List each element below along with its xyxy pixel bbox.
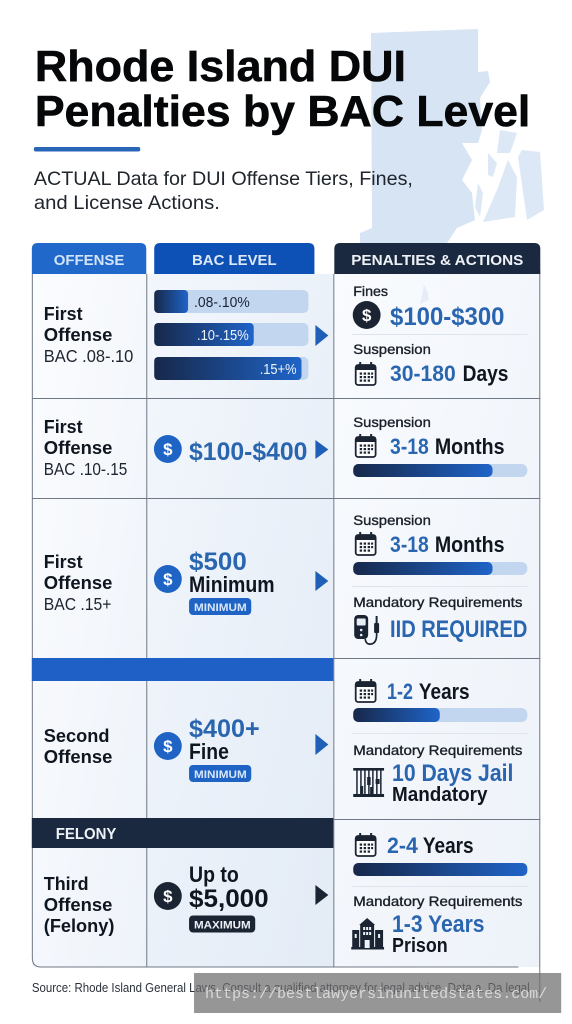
mandatory requirement: prison: Prison <box>392 935 448 957</box>
mandatory requirement: jail: 10 Days Jail <box>392 760 513 787</box>
suspension: 1-2 <box>387 679 413 704</box>
suspension: 2-4 <box>387 833 419 858</box>
offense label: Offense <box>44 324 112 345</box>
mandatory requirement: jail <box>353 743 523 806</box>
fine amount: $ <box>163 570 173 589</box>
source footnote: Source: Rhode Island General Laws. Consult a qualified attorney for legal advice. Data a. Da legal... <box>32 981 539 995</box>
suspension: Suspension <box>353 342 431 357</box>
watermark URL: https://bestlawyersinunitedstates.com/ <box>205 987 547 1003</box>
mandatory requirement: IID: Mandatory Requirements <box>353 595 523 610</box>
offense label <box>44 551 112 614</box>
offense label <box>44 303 133 366</box>
felony band <box>32 818 333 848</box>
mandatory requirement: prison: 1-3 Years <box>392 911 485 938</box>
offense label: BAC .15+ <box>44 594 111 614</box>
fines: Fines <box>353 284 388 299</box>
table cell backgrounds <box>32 270 540 1002</box>
icon: ignition interlock device <box>354 615 379 644</box>
row 5: third offense <box>44 833 527 957</box>
felony band: FELONY <box>56 826 117 843</box>
header: BAC level: BAC LEVEL <box>192 252 277 269</box>
header: penalties and actions <box>334 243 540 274</box>
arrow <box>315 571 328 591</box>
fines: $ <box>362 306 372 325</box>
fine amount <box>154 715 260 782</box>
subtitle <box>34 169 413 214</box>
BAC bar chart <box>154 290 308 380</box>
offense label: First <box>44 551 83 572</box>
fine amount: $ <box>163 737 173 756</box>
offense label: BAC .08-.10 <box>44 346 133 366</box>
suspension <box>353 513 527 575</box>
fine amount <box>154 862 269 932</box>
fine amount <box>154 435 307 466</box>
suspension: Years <box>419 679 470 704</box>
header: penalties and actions: PENALTIES & ACTIONS <box>351 252 523 269</box>
fines <box>353 284 504 331</box>
mandatory requirement: IID: IID REQUIRED <box>390 616 527 643</box>
suspension: 30-180 <box>390 361 456 386</box>
offense label: Second <box>44 725 109 746</box>
mandatory requirement: jail: Mandatory <box>392 784 488 806</box>
mandatory requirement: IID <box>353 595 527 644</box>
offense label <box>44 873 114 936</box>
row 1: first offense .08-.10 <box>44 284 527 386</box>
blue section band <box>32 658 333 681</box>
suspension: Days <box>463 361 508 386</box>
fine amount: MINIMUM <box>194 769 247 781</box>
suspension: Years <box>423 833 474 858</box>
suspension: Suspension <box>353 415 431 430</box>
header: offense <box>32 243 146 274</box>
suspension <box>353 415 527 477</box>
arrow <box>315 885 328 905</box>
subtitle: ACTUAL Data for DUI Offense Tiers, Fines, <box>34 169 413 190</box>
suspension: Months <box>435 532 504 557</box>
watermark URL <box>194 973 561 1013</box>
row 3: first offense .15+ <box>44 513 527 644</box>
offense label: Offense <box>44 894 112 915</box>
background map of Rhode Island <box>360 29 544 243</box>
suspension <box>353 679 527 722</box>
fine amount: MAXIMUM <box>194 919 251 932</box>
offense label: (Felony) <box>44 915 114 936</box>
icon: jail bars <box>353 768 384 797</box>
fine amount: Fine <box>189 739 229 764</box>
offense label: BAC .10-.15 <box>44 459 127 479</box>
title <box>35 42 530 136</box>
offense label: Offense <box>44 437 112 458</box>
offense label: Offense <box>44 572 112 593</box>
subtitle: and License Actions. <box>34 193 220 214</box>
offense label: First <box>44 303 83 324</box>
row 4: second offense <box>44 679 527 806</box>
offense label: Third <box>44 873 89 894</box>
offense label: First <box>44 416 83 437</box>
offense label: Offense <box>44 746 112 767</box>
title underline <box>34 147 140 152</box>
fines: $100-$300 <box>390 303 504 331</box>
table <box>32 243 540 1002</box>
arrow <box>315 325 328 346</box>
suspension <box>353 833 527 876</box>
BAC bar chart: .08-.10% <box>194 294 250 311</box>
fine amount: $ <box>163 440 173 459</box>
BAC bar chart: .15+% <box>260 361 297 378</box>
icon: prison building <box>351 918 384 950</box>
fine amount: Up to <box>189 862 239 887</box>
arrow <box>315 734 328 755</box>
offense label <box>44 725 112 767</box>
mandatory requirement: prison <box>351 894 523 957</box>
fine amount: Minimum <box>189 572 275 597</box>
suspension: Months <box>435 434 504 459</box>
mandatory requirement: prison: Mandatory Requirements <box>353 894 523 909</box>
BAC bar chart: .10-.15% <box>197 327 249 344</box>
suspension: 3-18 <box>390 532 429 557</box>
fine amount: MINIMUM <box>194 602 247 614</box>
header: BAC level <box>154 243 314 274</box>
fine amount: $400+ <box>189 715 260 743</box>
header: offense: OFFENSE <box>54 252 124 269</box>
fine amount <box>154 548 275 615</box>
offense label <box>44 416 127 479</box>
suspension <box>353 342 508 386</box>
row 2: first offense .10-.15 <box>44 415 527 479</box>
fine amount: $500 <box>189 548 247 576</box>
mandatory requirement: jail: Mandatory Requirements <box>353 743 523 758</box>
title: Rhode Island DUI <box>35 42 406 91</box>
title: Penalties by BAC Level <box>35 87 530 136</box>
fine amount: $ <box>163 887 173 906</box>
fine amount: $5,000 <box>189 885 269 913</box>
suspension: Suspension <box>353 513 431 528</box>
arrow <box>315 440 328 459</box>
suspension: 3-18 <box>390 434 429 459</box>
fine amount: $100-$400 <box>189 438 307 466</box>
